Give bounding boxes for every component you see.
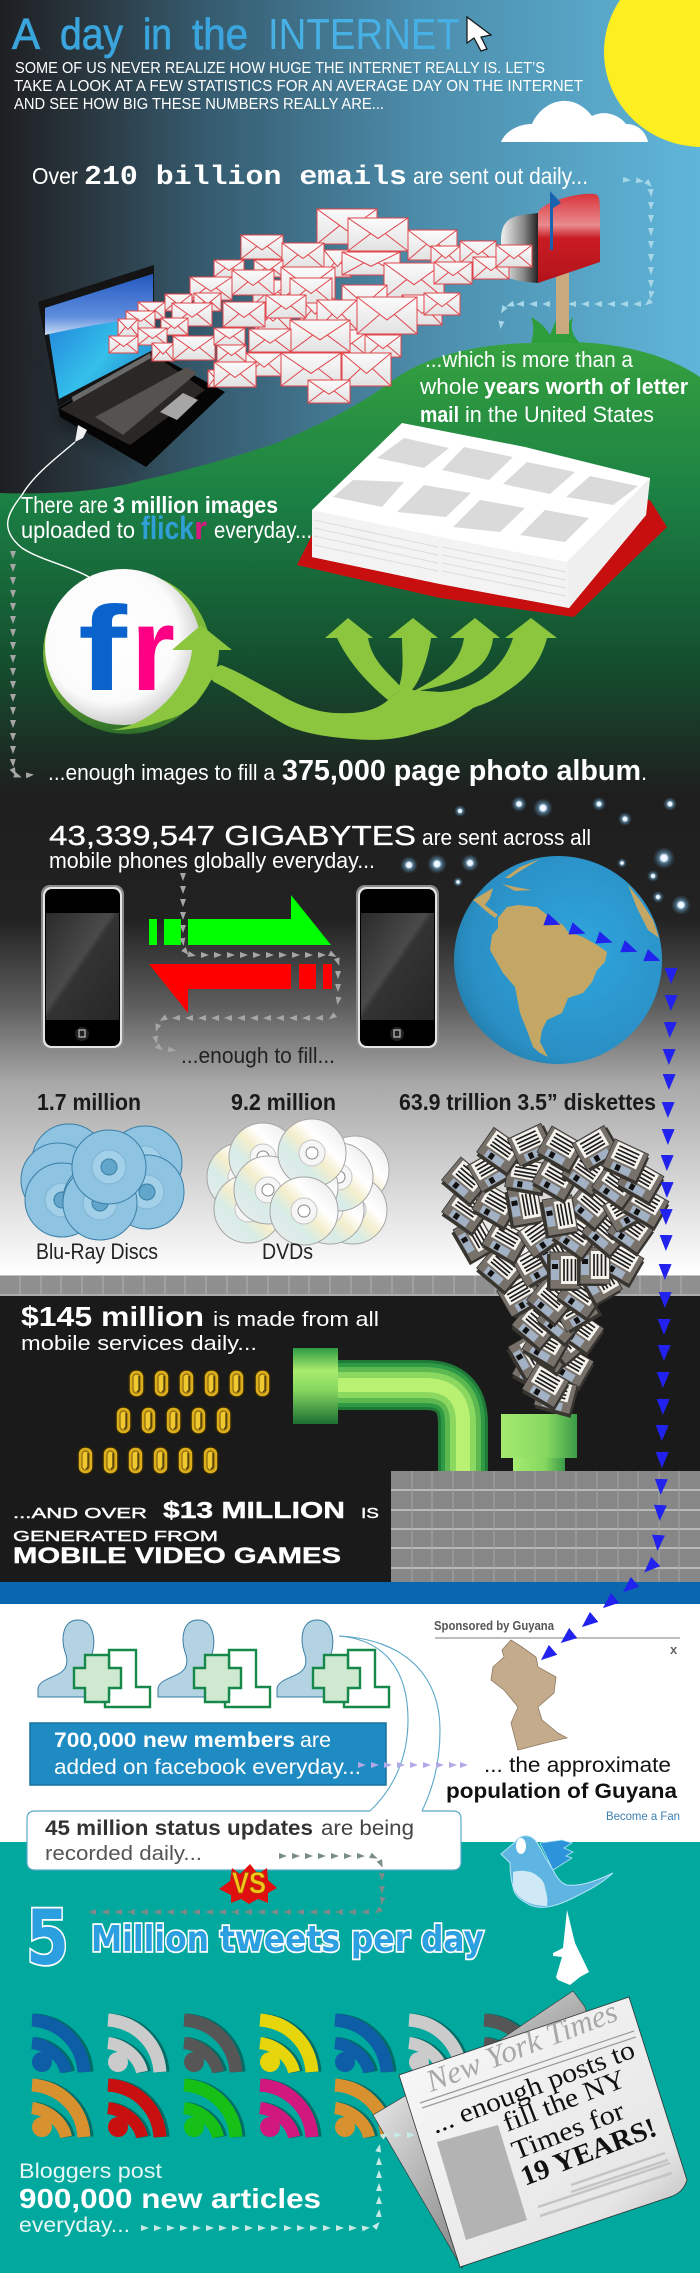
icon: twitter bird bbox=[501, 1836, 613, 1907]
arrow: dashes to fill bbox=[156, 877, 338, 1050]
panel: facebook section bbox=[0, 1604, 700, 1842]
tweets heading bbox=[26, 1893, 484, 1982]
text: photo album comparison: 375,000 page photo album bbox=[282, 755, 641, 787]
newspaper bbox=[373, 1991, 687, 2268]
icon: new member 2 bbox=[158, 1620, 270, 1707]
panel: brick ledge bbox=[0, 1275, 700, 1296]
intro text block: TAKE A LOOK AT A FEW STATISTICS FOR AN AVERAGE DAY ON THE INTERNET bbox=[14, 78, 583, 95]
text: mobile services revenue bbox=[21, 1301, 379, 1355]
arrow: blue path from globe to guyana bbox=[547, 922, 671, 1655]
title: day bbox=[60, 10, 123, 59]
guyana ad: sponsor header: Sponsored by Guyana bbox=[434, 1619, 555, 1633]
text: population of guyana: population of Guyana bbox=[446, 1780, 677, 1803]
emails heading: are sent out daily... bbox=[413, 163, 588, 189]
facebook members box: are bbox=[300, 1729, 331, 1752]
text: letter mail comparison: mail bbox=[420, 402, 459, 427]
panel: games section background bbox=[0, 1296, 700, 1582]
text: mobile video games revenue: GENERATED FROM bbox=[13, 1528, 218, 1545]
intro text block: AND SEE HOW BIG THESE NUMBERS REALLY ARE... bbox=[14, 96, 384, 113]
mobile heading: 43,339,547 GIGABYTES bbox=[49, 820, 416, 851]
title bbox=[12, 10, 460, 59]
icon: flickr ball with green rim: f bbox=[78, 582, 128, 716]
icon: sun bbox=[604, 0, 700, 147]
mobile heading: mobile phones globally everyday... bbox=[49, 848, 375, 873]
text: flickr uploads: everyday... bbox=[214, 517, 312, 543]
icon: cloud bbox=[501, 101, 648, 142]
title: INTERNET bbox=[268, 10, 460, 59]
emails heading: Over bbox=[32, 163, 78, 189]
text: flickr uploads: flick bbox=[141, 510, 194, 546]
panel: sky background bbox=[0, 0, 700, 510]
arrow: flickr to album dashes bbox=[13, 555, 30, 776]
text: mobile services revenue: $145 million bbox=[21, 1301, 204, 1332]
status updates speech bubble: are being bbox=[321, 1817, 414, 1840]
icon: pipe bbox=[293, 1348, 577, 1472]
text: mobile video games revenue: IS bbox=[361, 1505, 379, 1522]
icon: photo album bbox=[297, 423, 667, 617]
icon: flickr ball with green rim bbox=[43, 569, 211, 734]
icon: coins bbox=[78, 1370, 270, 1474]
title: in bbox=[143, 10, 172, 59]
text: flickr uploads: There are bbox=[21, 492, 108, 518]
text: mobile services revenue: mobile services daily... bbox=[21, 1333, 257, 1355]
mobile heading bbox=[49, 820, 591, 873]
label: dvds: DVDs bbox=[262, 1239, 313, 1264]
facebook members box: added on facebook everyday... bbox=[54, 1756, 361, 1779]
mobile heading: are sent across all bbox=[422, 825, 591, 850]
guyana ad: sponsor header bbox=[434, 1619, 680, 1657]
blue divider band bbox=[0, 1582, 700, 1604]
green hill bbox=[0, 342, 700, 800]
icon: earth globe bbox=[454, 856, 662, 1064]
facebook members box bbox=[30, 1723, 386, 1785]
text: enough to fill: ...enough to fill... bbox=[181, 1043, 335, 1068]
text: mobile video games revenue: ...AND OVER bbox=[13, 1505, 147, 1522]
arrow: branching green arrows bbox=[112, 618, 557, 740]
arrow: mailbox to letter mail bbox=[501, 180, 651, 325]
icon: usb plug bbox=[75, 425, 87, 442]
facebook members box: 700,000 new members bbox=[54, 1729, 295, 1752]
connector: laptop cable to flickr bbox=[8, 442, 89, 577]
badge: vs starburst bbox=[219, 1864, 277, 1904]
text: bloggers stat: Bloggers post bbox=[19, 2160, 162, 2183]
stat: blu-ray label: 1.7 million bbox=[37, 1089, 141, 1115]
icon: new member 1 bbox=[38, 1620, 150, 1707]
icon: laptop bbox=[30, 265, 225, 472]
status updates speech bubble: 45 million status updates bbox=[45, 1817, 313, 1840]
status updates speech bubble bbox=[27, 1636, 461, 1870]
intro text block bbox=[14, 60, 583, 113]
text: flickr uploads: r bbox=[194, 510, 207, 546]
newspaper: New York Times bbox=[420, 1993, 622, 2099]
tweets heading: 5 bbox=[26, 1893, 69, 1982]
emails heading bbox=[32, 163, 588, 193]
newspaper: Times for bbox=[507, 2095, 628, 2166]
label: blu-ray discs: Blu-Ray Discs bbox=[36, 1239, 158, 1264]
stat: dvd label: 9.2 million bbox=[231, 1089, 336, 1115]
text: bloggers stat: everyday... bbox=[19, 2214, 130, 2237]
arrow: members to guyana bbox=[362, 1764, 464, 1766]
panel: gray block wall bbox=[391, 1471, 700, 1582]
icon: dvd pile bbox=[207, 1119, 389, 1245]
panel: twitter and blog section bbox=[0, 1842, 700, 2273]
icon: phone left bbox=[41, 885, 124, 1050]
title: A bbox=[12, 10, 41, 59]
panel: mobile section background bbox=[0, 795, 700, 1275]
newspaper: 19 YEARS! bbox=[516, 2112, 661, 2193]
text: letter mail comparison bbox=[419, 347, 688, 427]
text: flickr uploads: 3 million images bbox=[113, 492, 278, 518]
arrow: green send bbox=[149, 895, 331, 945]
tweets heading: Million tweets per day bbox=[91, 1919, 484, 1960]
text: letter mail comparison: ...which is more than a bbox=[425, 347, 634, 372]
icon: phone right bbox=[356, 885, 439, 1050]
text: photo album comparison bbox=[48, 755, 647, 787]
title: the bbox=[192, 10, 248, 59]
text: population of guyana: ... the approximate bbox=[484, 1754, 671, 1777]
rss icon grid bbox=[32, 2020, 539, 2137]
icon: mouse cursor bbox=[467, 17, 491, 51]
icon: mailbox bbox=[501, 191, 600, 343]
text: bloggers stat: 900,000 new articles bbox=[19, 2183, 321, 2214]
text: mobile video games revenue bbox=[13, 1497, 379, 1568]
arrow: status vs tweets bbox=[92, 1856, 382, 1912]
icon: bird dropping bbox=[553, 1910, 589, 1985]
intro text block: SOME OF US NEVER REALIZE HOW HUGE THE INTERNET REALLY IS. LET’S bbox=[15, 60, 545, 77]
stat: diskettes label: 63.9 trillion 3.5” diskettes bbox=[399, 1089, 656, 1115]
text: flickr uploads bbox=[21, 492, 312, 546]
text: mobile video games revenue: $13 MILLION bbox=[163, 1497, 345, 1523]
text: mobile video games revenue: MOBILE VIDEO GAMES bbox=[13, 1543, 341, 1568]
text: flickr uploads: uploaded to bbox=[21, 517, 135, 543]
text: mobile services revenue: is made from all bbox=[213, 1309, 379, 1331]
arrow: bloggers to newspaper bbox=[145, 2135, 411, 2228]
icon: flickr ball with green rim: r bbox=[131, 582, 175, 716]
emails heading: 210 billion emails bbox=[84, 163, 407, 193]
email envelope cloud bbox=[109, 209, 532, 403]
icon: blu-ray disc pile bbox=[21, 1124, 184, 1240]
text: population of guyana: Become a Fan bbox=[606, 1809, 680, 1823]
stars bbox=[400, 796, 691, 915]
text: bloggers stat bbox=[19, 2160, 321, 2237]
text: letter mail comparison: in the United States bbox=[465, 402, 654, 427]
text: letter mail comparison: years worth of letter bbox=[484, 374, 688, 399]
text: letter mail comparison: whole bbox=[419, 374, 479, 399]
badge: vs starburst: VS bbox=[232, 1867, 266, 1900]
status updates speech bubble: recorded daily... bbox=[45, 1843, 202, 1865]
icon: floppy diskette pile bbox=[440, 1123, 671, 1418]
text: photo album comparison: . bbox=[641, 760, 647, 785]
text: population of guyana bbox=[446, 1754, 680, 1823]
icon: guyana map bbox=[491, 1640, 567, 1750]
guyana ad: sponsor header: x bbox=[670, 1642, 678, 1657]
icon: new member 3 bbox=[277, 1620, 389, 1707]
newspaper: ... enough posts to bbox=[426, 2034, 639, 2140]
newspaper: fill the NY bbox=[498, 2063, 630, 2138]
arrow: red receive bbox=[149, 964, 332, 1013]
text: photo album comparison: ...enough images to fill a bbox=[48, 760, 276, 785]
